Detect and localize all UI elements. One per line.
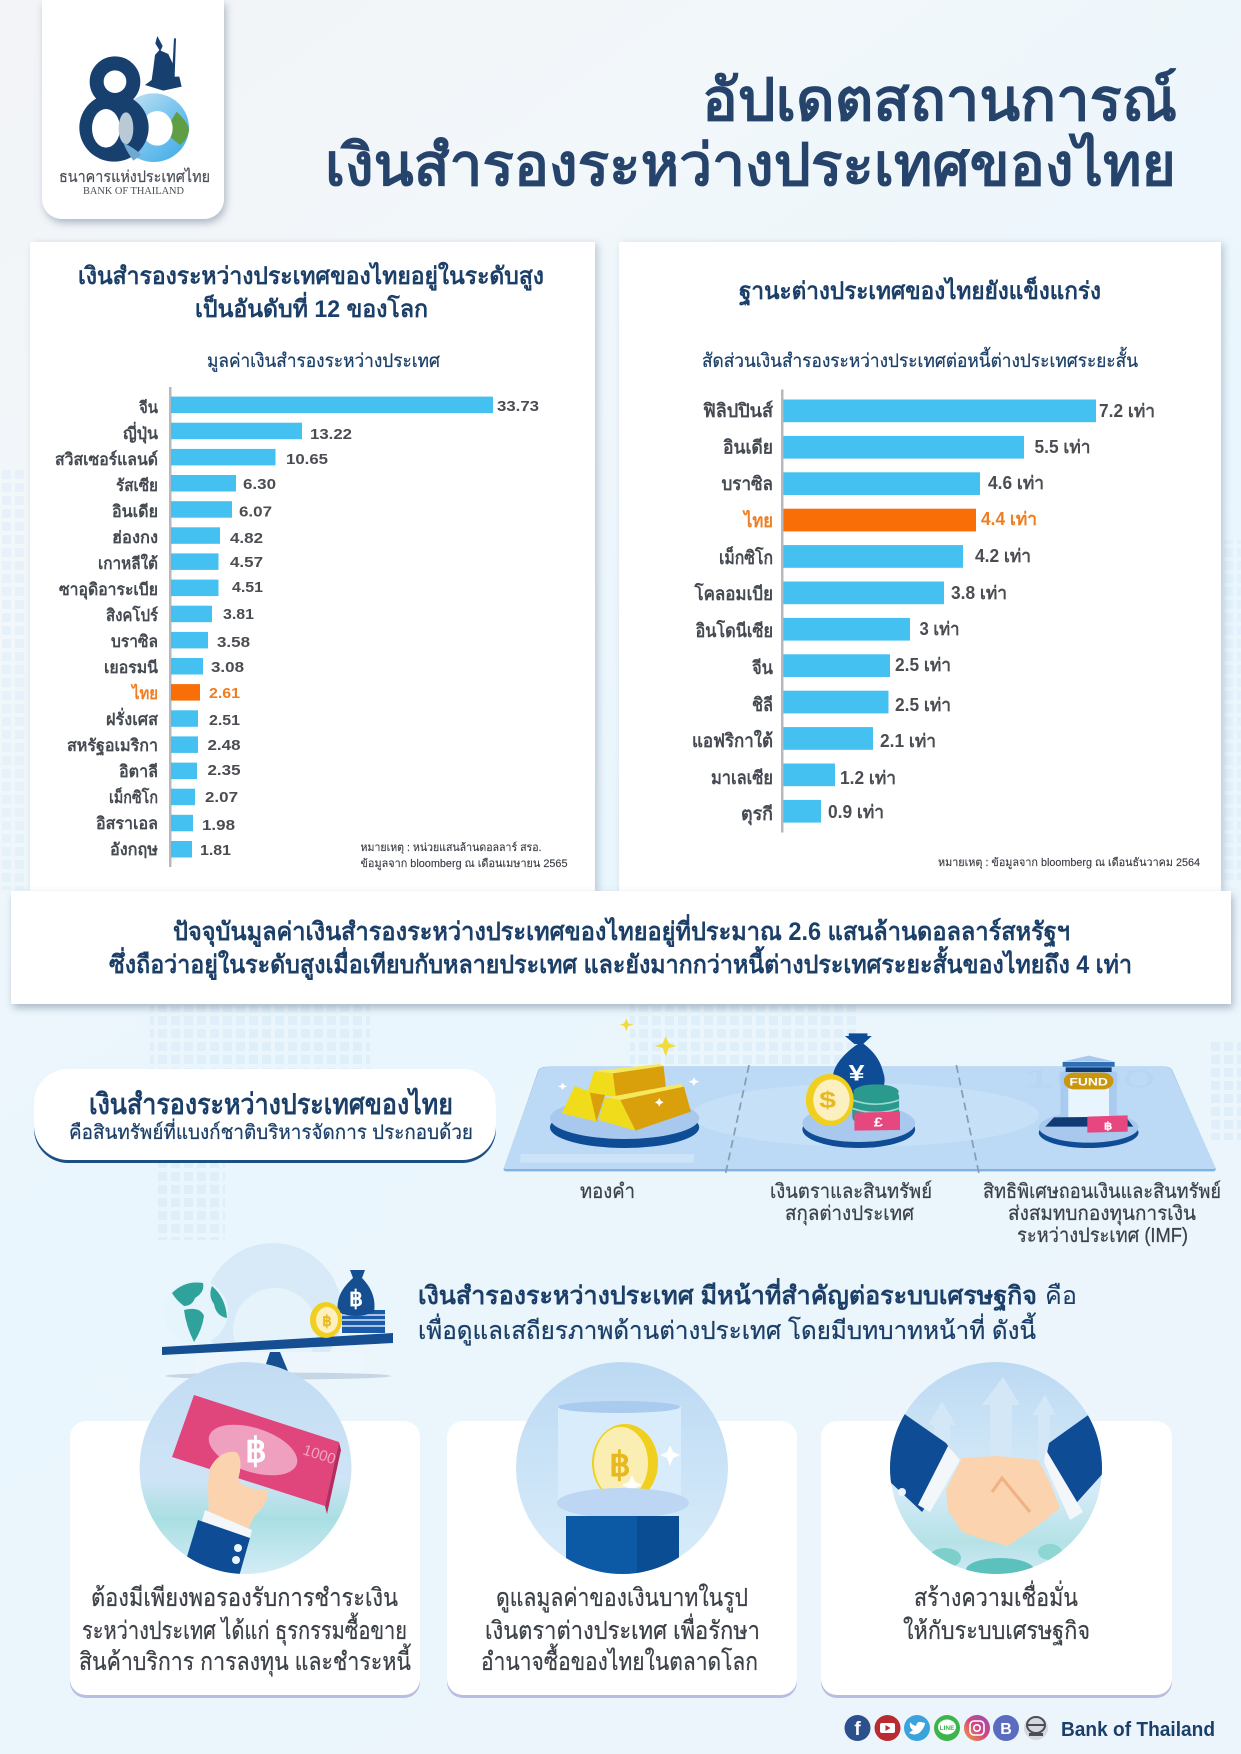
icon: twitter bbox=[904, 1715, 930, 1741]
bar chart: reserves to short-term debt: โคลอมเบีย bbox=[694, 582, 773, 604]
icon: money bag, coin and foreign notes: £ bbox=[874, 1116, 884, 1130]
bar chart: reserves to short-term debt: 3 เท่า bbox=[920, 619, 960, 639]
bar chart: reserves to short-term debt: 2.1 เท่า bbox=[880, 731, 936, 751]
bar chart: reserves by country: 2.35 bbox=[208, 762, 240, 779]
text: role of reserves: คือ bbox=[1045, 1282, 1077, 1310]
footer: social icons and brand bbox=[844, 1715, 1215, 1741]
icon: facebook: f bbox=[854, 1719, 861, 1740]
bar chart: reserves to short-term debt: 2.5 เท่า bbox=[895, 695, 951, 715]
callout: key message banner: ซึ่งถือว่าอยู่ในระดับสูงเมื่อเทียบกับหลายประเทศ และยังมากกว่าหนี้ต่างประเทศระยะสั้นของไทยถึง 4 เท่า bbox=[109, 945, 1132, 981]
panel: international reserves value chart bbox=[30, 242, 595, 892]
label: foreign currency assets bbox=[770, 1180, 932, 1226]
heading pill: what reserves are: เงินสำรองระหว่างประเทศของไทย bbox=[89, 1087, 453, 1121]
bar chart: reserves by country: ฝรั่งเศส bbox=[106, 707, 159, 729]
bar chart: reserves to short-term debt: มาเลเซีย bbox=[711, 767, 773, 788]
icon: IMF fund building: FUND bbox=[1069, 1076, 1108, 1088]
bar chart: reserves by country: 6.30 bbox=[243, 476, 276, 493]
bar chart: reserves by country: อินเดีย bbox=[112, 502, 158, 521]
panel heading bbox=[78, 261, 544, 323]
icon: line bbox=[934, 1715, 960, 1741]
footnote: หมายเหตุ : ข้อมูลจาก bloomberg ณ เดือนธันวาคม 2564 bbox=[938, 856, 1200, 869]
icon: instagram bbox=[964, 1715, 990, 1741]
icon: handshake bbox=[885, 1362, 1106, 1582]
bar chart: reserves to short-term debt: 4.6 เท่า bbox=[988, 473, 1044, 493]
icon: bot app bbox=[993, 1715, 1019, 1741]
icon: coin in glass case: ฿ bbox=[609, 1446, 631, 1484]
callout: key message banner bbox=[11, 891, 1231, 1004]
platform: three asset types bbox=[506, 1018, 1221, 1247]
bar chart: reserves by country: สหรัฐอเมริกา bbox=[67, 736, 158, 756]
card text: สร้างความเชื่อมั่น bbox=[914, 1580, 1078, 1612]
bar chart: reserves by country: 4.82 bbox=[230, 530, 263, 547]
icon: coin in glass case bbox=[516, 1362, 728, 1576]
icon: money bag, coin and foreign notes: ¥ bbox=[849, 1062, 865, 1086]
bar chart: reserves by country: อิสราเอล bbox=[96, 814, 158, 833]
logo card bbox=[42, 0, 224, 219]
bar chart: reserves to short-term debt bbox=[692, 390, 1155, 832]
card text: สินค้าบริการ การลงทุน และชำระหนี้ bbox=[79, 1643, 411, 1677]
icon: money bag, coin and foreign notes: $ bbox=[819, 1086, 836, 1113]
icon: balance scale with globe and money bag: ฿ bbox=[322, 1313, 332, 1330]
panel: card 1 payment bbox=[70, 1362, 420, 1698]
panel: external position chart bbox=[619, 242, 1221, 892]
icon: balance scale with globe and money bag: ฿ bbox=[349, 1286, 363, 1311]
bar chart: reserves by country: เม็กซิโก bbox=[109, 786, 158, 807]
icon: website bbox=[1024, 1716, 1048, 1740]
bar chart: reserves by country: สวิสเซอร์แลนด์ bbox=[55, 450, 158, 469]
panel heading: เงินสำรองระหว่างประเทศของไทยอยู่ในระดับสูง bbox=[78, 261, 544, 291]
bar chart: reserves to short-term debt: จีน bbox=[752, 657, 773, 678]
bar chart: reserves to short-term debt: 7.2 เท่า bbox=[1099, 401, 1155, 421]
bar chart: reserves by country: อิตาลี bbox=[119, 762, 158, 781]
label: foreign currency assets: สกุลต่างประเทศ bbox=[785, 1203, 914, 1226]
bar chart: reserves to short-term debt: ไทย bbox=[742, 509, 773, 531]
card text: อำนาจซื้อของไทยในตลาดโลก bbox=[481, 1643, 758, 1676]
bar chart: reserves by country: จีน bbox=[139, 398, 159, 417]
bar chart: reserves by country: 2.61 bbox=[209, 685, 240, 702]
logo Thai name: ธนาคารแห่งประเทศไทย bbox=[59, 167, 210, 186]
bar chart: reserves to short-term debt: ฟิลิปปินส์ bbox=[703, 400, 774, 421]
text: role of reserves: เพื่อดูแลเสถียรภาพด้านต่างประเทศ โดยมีบทบาทหน้าที่ ดังนี้ bbox=[418, 1312, 1036, 1346]
bar chart: reserves by country: 33.73 bbox=[497, 398, 539, 415]
chart subtitle: สัดส่วนเงินสำรองระหว่างประเทศต่อหนี้ต่างประเทศระยะสั้น bbox=[702, 347, 1138, 372]
card text: เงินตราต่างประเทศ เพื่อรักษา bbox=[485, 1613, 760, 1645]
panel heading: ฐานะต่างประเทศของไทยยังแข็งแกร่ง bbox=[739, 276, 1101, 307]
bar chart: reserves to short-term debt: 0.9 เท่า bbox=[828, 802, 884, 822]
icon: bot app: B bbox=[1000, 1721, 1012, 1738]
icon: facebook bbox=[844, 1715, 870, 1741]
card text: ต้องมีเพียงพอรองรับการชำระเงิน bbox=[91, 1584, 398, 1612]
card text bbox=[903, 1580, 1090, 1645]
bar chart: reserves to short-term debt: ตุรกี bbox=[741, 803, 773, 826]
footnote: ข้อมูลจาก bloomberg ณ เดือนเมษายน 2565 bbox=[360, 857, 568, 870]
bar chart: reserves by country: ญี่ปุ่น bbox=[123, 421, 159, 444]
card text bbox=[481, 1583, 760, 1676]
bar chart: reserves by country: รัสเซีย bbox=[116, 476, 158, 495]
icon: hand holding banknote bbox=[140, 1362, 352, 1580]
bar chart: reserves to short-term debt: 5.5 เท่า bbox=[1034, 437, 1090, 457]
platform: three asset types: 1000 bbox=[1021, 1066, 1156, 1093]
text: role of reserves: เงินสำรองระหว่างประเทศ มีหน้าที่สำคัญต่อระบบเศรษฐกิจ bbox=[418, 1278, 1037, 1312]
heading pill: what reserves are bbox=[34, 1069, 496, 1163]
bar chart: reserves by country: 4.57 bbox=[230, 554, 263, 571]
bar chart: reserves by country: บราซิล bbox=[111, 632, 158, 651]
footnote: หมายเหตุ : หน่วยแสนล้านดอลลาร์ สรอ. bbox=[360, 841, 542, 854]
footnote bbox=[360, 841, 568, 870]
icon: balance scale with globe and money bag bbox=[162, 1243, 393, 1381]
bar chart: reserves to short-term debt: ชิลี bbox=[752, 694, 773, 715]
icon: hand holding banknote: 1000 bbox=[301, 1442, 338, 1468]
heading pill: what reserves are: คือสินทรัพย์ที่แบงก์ชาติบริหารจัดการ ประกอบด้วย bbox=[69, 1118, 473, 1144]
title bbox=[325, 67, 1177, 198]
brand name: Bank of Thailand bbox=[1061, 1719, 1215, 1741]
bar chart: reserves to short-term debt: แอฟริกาใต้ bbox=[692, 729, 773, 751]
bar chart: reserves to short-term debt: 2.5 เท่า bbox=[895, 655, 951, 675]
bar chart: reserves by country: 1.98 bbox=[202, 817, 235, 834]
icon: IMF fund building bbox=[1039, 1056, 1139, 1148]
bar chart: reserves by country: สิงคโปร์ bbox=[106, 605, 158, 625]
bar chart: reserves by country: อังกฤษ bbox=[110, 841, 158, 859]
bar chart: reserves by country: 6.07 bbox=[239, 504, 272, 520]
panel: card 2 baht value bbox=[447, 1362, 797, 1698]
icon: sparkles bbox=[558, 1018, 700, 1107]
bar chart: reserves by country: 4.51 bbox=[232, 579, 263, 596]
bar chart: reserves to short-term debt: เม็กซิโก bbox=[719, 545, 773, 568]
bar chart: reserves by country: 2.07 bbox=[205, 789, 238, 806]
label: SDR and IMF bbox=[983, 1180, 1221, 1247]
label: SDR and IMF: ระหว่างประเทศ (IMF) bbox=[1017, 1225, 1188, 1247]
icon: line: LINE bbox=[940, 1725, 955, 1732]
bar chart: reserves by country: 13.22 bbox=[310, 426, 352, 443]
card text: ให้กับระบบเศรษฐกิจ bbox=[903, 1616, 1090, 1645]
bar chart: reserves by country: ฮ่องกง bbox=[112, 529, 158, 547]
bar chart: reserves by country: 2.48 bbox=[208, 737, 240, 754]
bar chart: reserves by country: ไทย bbox=[130, 683, 158, 703]
label: SDR and IMF: ส่งสมทบกองทุนการเงิน bbox=[1008, 1203, 1196, 1226]
icon: hand holding banknote: ฿ bbox=[245, 1432, 267, 1470]
bar chart: reserves to short-term debt: 4.2 เท่า bbox=[975, 546, 1031, 566]
icon: Bank of Thailand 80th anniversary logo bbox=[79, 36, 189, 162]
card text: ระหว่างประเทศ ได้แก่ ธุรกรรมซื้อขาย bbox=[82, 1612, 407, 1646]
bar chart: reserves by country: เกาหลีใต้ bbox=[98, 553, 158, 573]
icon: youtube bbox=[874, 1715, 900, 1741]
bar chart: reserves by country: 3.81 bbox=[223, 606, 254, 623]
bar chart: reserves to short-term debt: 1.2 เท่า bbox=[840, 768, 896, 788]
bar chart: reserves to short-term debt: 4.4 เท่า bbox=[981, 509, 1037, 529]
logo English name: BANK OF THAILAND bbox=[83, 186, 184, 197]
label: foreign currency assets: เงินตราและสินทรัพย์ bbox=[770, 1180, 932, 1203]
icon: gold bars bbox=[550, 1064, 699, 1148]
title: เงินสำรองระหว่างประเทศของไทย bbox=[325, 132, 1176, 198]
card text: ดูแลมูลค่าของเงินบาทในรูป bbox=[496, 1583, 748, 1613]
bar chart: reserves by country: 3.58 bbox=[217, 634, 250, 651]
bar chart: reserves to short-term debt: อินเดีย bbox=[723, 436, 773, 458]
bar chart: reserves by country: 1.81 bbox=[200, 842, 231, 859]
bar chart: reserves to short-term debt: 3.8 เท่า bbox=[951, 583, 1007, 603]
bar chart: reserves by country: 2.51 bbox=[209, 712, 240, 729]
label: SDR and IMF: สิทธิพิเศษถอนเงินและสินทรัพย์ bbox=[983, 1180, 1221, 1203]
title: อัปเดตสถานการณ์ bbox=[702, 67, 1177, 133]
panel heading: เป็นอันดับที่ 12 ของโลก bbox=[195, 291, 428, 323]
label: gold: ทองคำ bbox=[580, 1181, 635, 1203]
bar chart: reserves by country: 3.08 bbox=[211, 659, 244, 676]
bar chart: reserves by country: 10.65 bbox=[286, 451, 328, 468]
bar chart: reserves by country bbox=[55, 387, 539, 867]
panel: card 3 confidence bbox=[821, 1362, 1172, 1698]
bar chart: reserves to short-term debt: อินโดนีเซีย bbox=[696, 619, 773, 641]
bar chart: reserves to short-term debt: บราซิล bbox=[722, 473, 773, 494]
bar chart: reserves by country: เยอรมนี bbox=[104, 658, 159, 677]
chart subtitle: มูลค่าเงินสำรองระหว่างประเทศ bbox=[207, 351, 440, 372]
text: role of reserves bbox=[418, 1278, 1077, 1346]
card text bbox=[79, 1584, 411, 1677]
callout: key message banner: ปัจจุบันมูลค่าเงินสำรองระหว่างประเทศของไทยอยู่ที่ประมาณ 2.6 แสนล้านดอลลาร์สหรัฐฯ bbox=[173, 914, 1070, 948]
icon: IMF fund building: ฿ bbox=[1104, 1120, 1113, 1132]
icon: money bag, coin and foreign notes bbox=[802, 1033, 915, 1148]
bar chart: reserves by country: ซาอุดิอาระเบีย bbox=[59, 580, 158, 600]
